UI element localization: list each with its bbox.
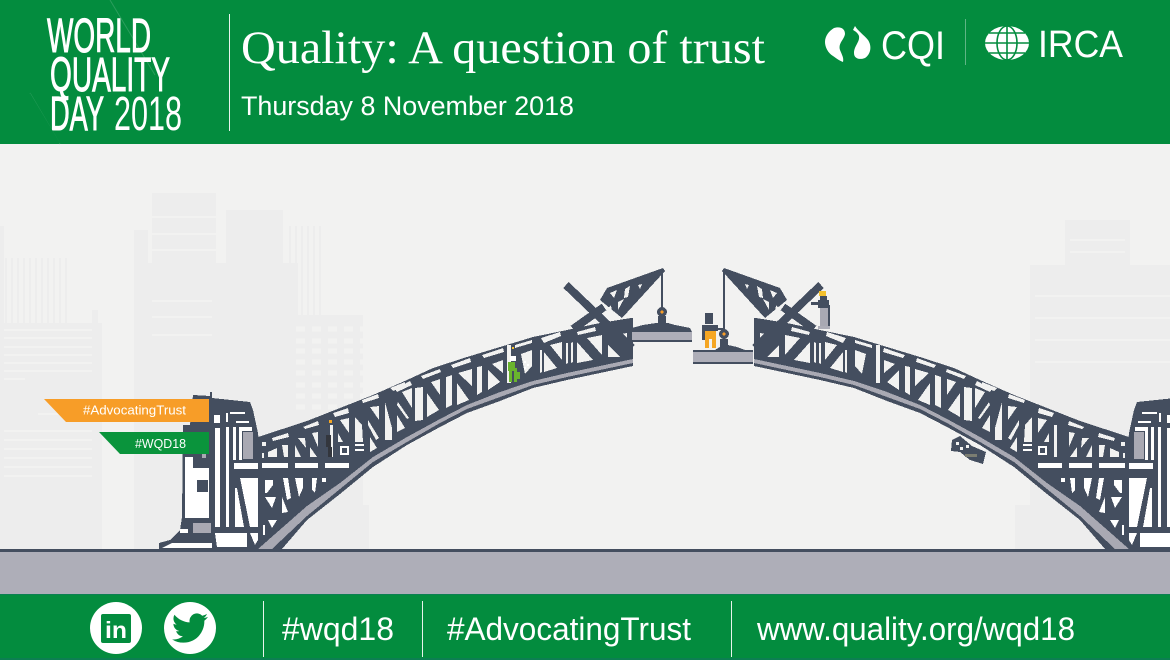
icon: Twitter [164,602,216,654]
logo: World Quality Day 2018 [30,0,182,144]
crane [566,268,665,348]
flag: #AdvocatingTrust [44,399,209,422]
logo divider [965,19,966,65]
CQI logo [825,24,945,68]
worker: orange overalls [702,313,724,348]
truss openings [262,327,627,458]
icon: LinkedIn [90,602,142,654]
footer band [0,594,1170,660]
hashtag: wqd18: #wqd18 [282,611,394,647]
background city skyline [0,193,1170,550]
ground [0,549,1170,594]
bridge: left half [159,268,665,549]
date: Thursday 8 November 2018 [241,91,574,121]
CQI logo: CQI [881,24,945,68]
website address: www.quality.org/wqd18 [756,611,1075,647]
IRCA logo [985,24,1124,66]
worker: yellow helmet [811,291,830,329]
logo: World Quality Day 2018: WORLD [47,10,151,63]
title: Quality: A question of trust [241,22,765,74]
left tower [159,392,262,549]
logo: World Quality Day 2018: QUALITY [50,49,170,102]
header divider [229,14,230,131]
hanging maintenance rig [951,436,986,464]
IRCA logo: IRCA [1038,24,1124,66]
arch chord [258,359,633,549]
worker: dark figure on left span [326,420,332,457]
flag: #WQD18: #WQD18 [135,437,186,451]
hashtag: AdvocatingTrust: #AdvocatingTrust [447,611,691,647]
footer divider 3 [731,601,732,657]
flag: #WQD18 [99,432,209,454]
footer divider 2 [422,601,423,657]
header band [0,0,1170,144]
truss lattice [258,318,633,549]
flag: #AdvocatingTrust: #AdvocatingTrust [83,404,187,418]
right bridge segment with hoist [693,272,753,364]
logo: World Quality Day 2018: 2018 [114,88,182,141]
left bridge segment with hoist [632,272,692,342]
deck and lower openings [262,444,364,535]
logo: World Quality Day 2018: DAY [50,88,104,141]
footer divider 1 [263,601,264,657]
worker: green overalls [508,347,529,382]
bridge: right half [722,268,1170,549]
icon: LinkedIn: in [105,617,127,643]
